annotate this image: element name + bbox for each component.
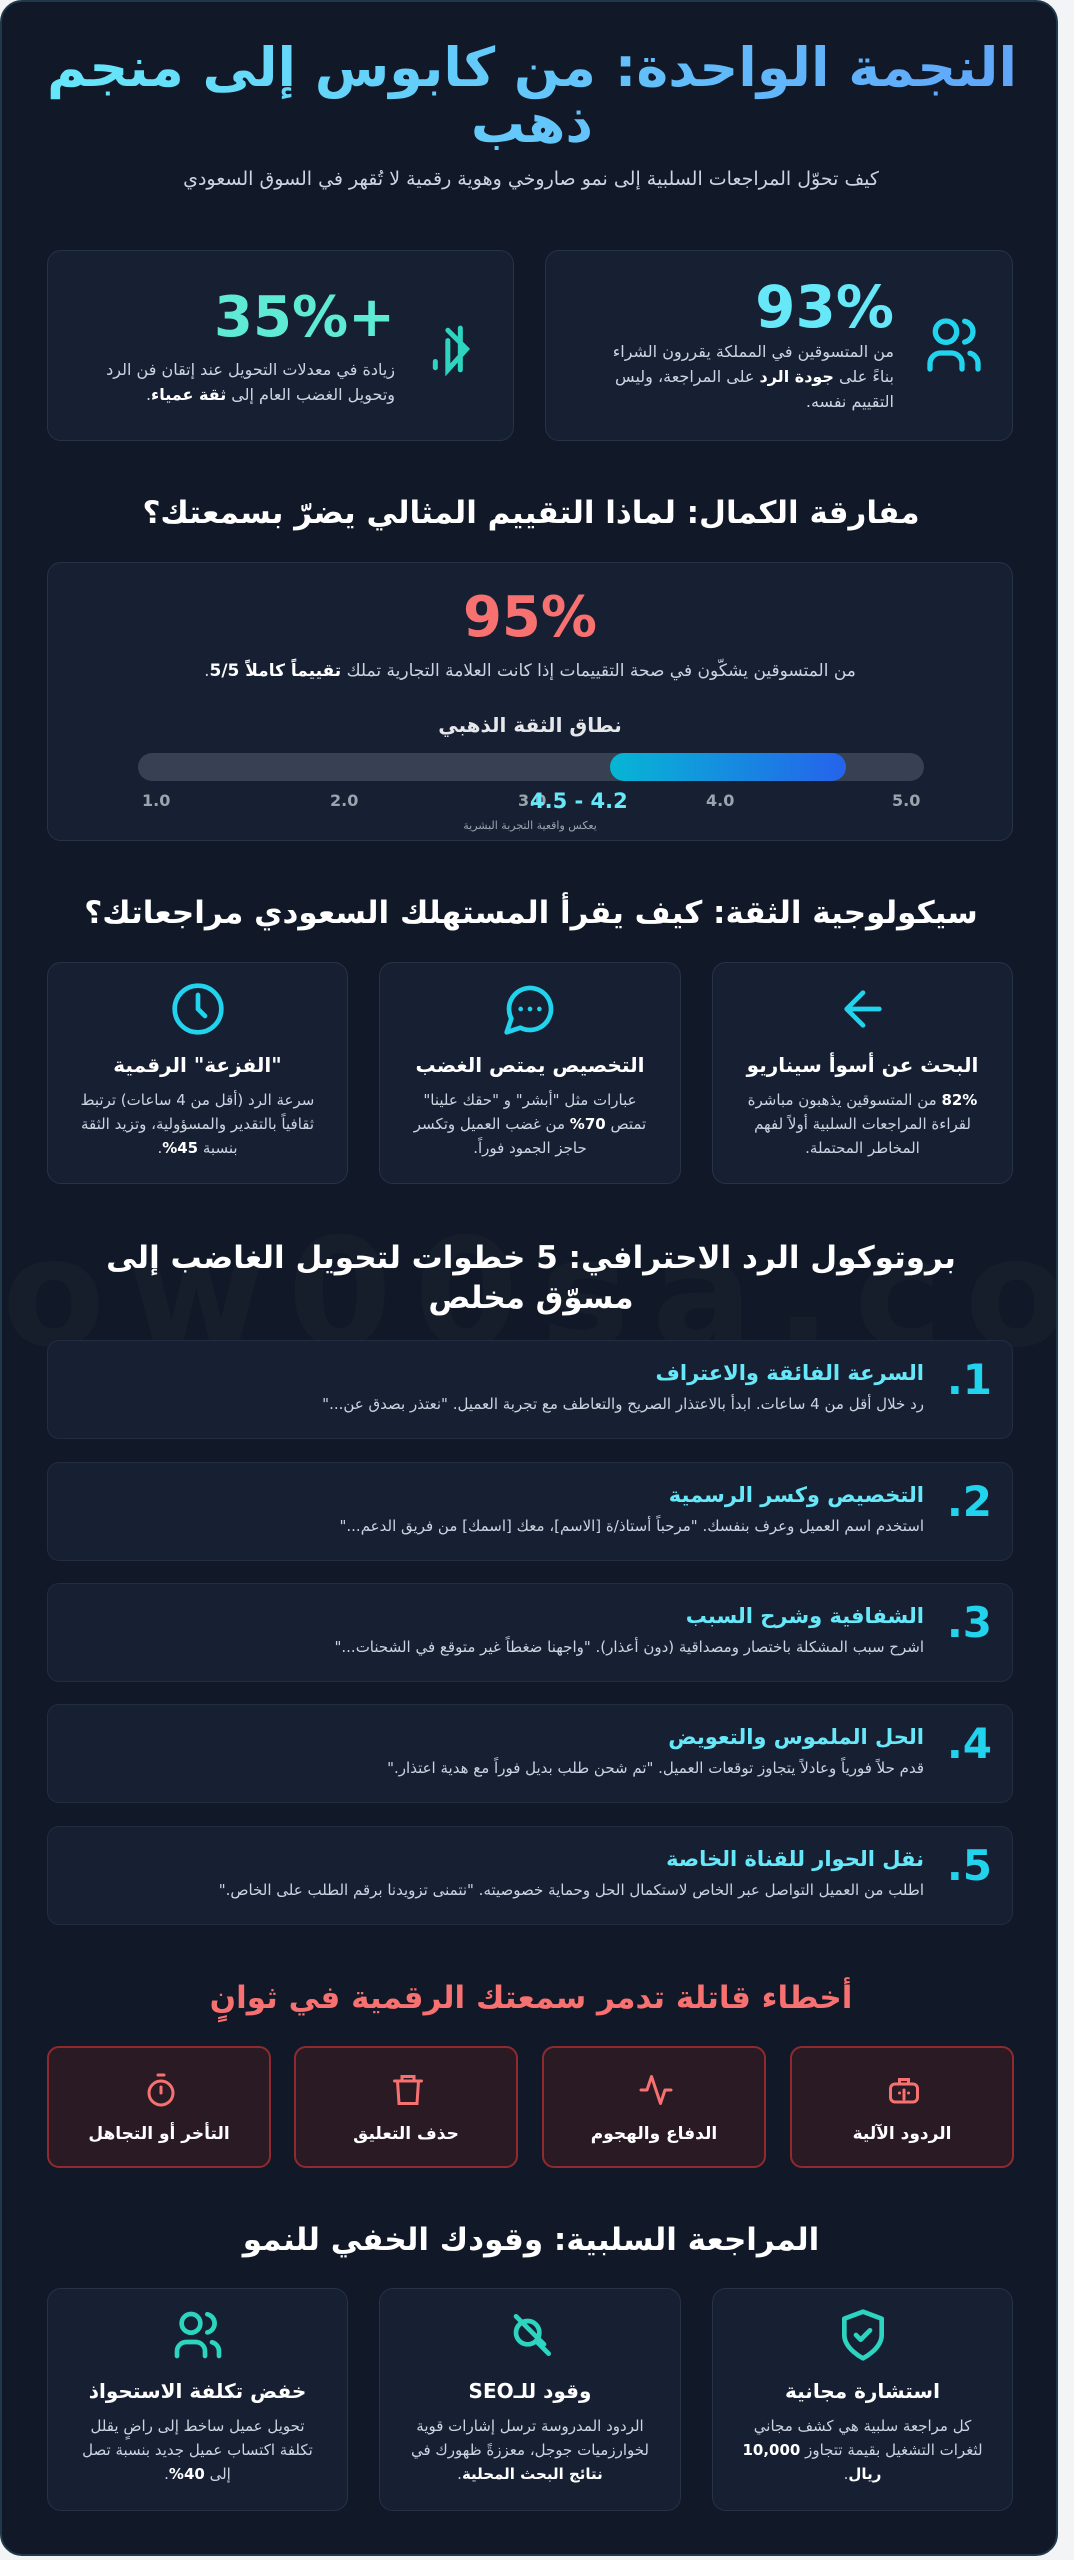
- mistake: delete: حذف التعليق: [353, 2124, 459, 2144]
- axis labels: 4.5 - 4.2: [530, 789, 628, 813]
- icon: trend: [432, 326, 470, 376]
- card: free consultation: كل مراجعة سلبية هي كشف مجاني لثغرات التشغيل بقيمة تتجاوز 10,000 ريال.: [742, 2417, 983, 2483]
- step 3: [47, 1583, 1013, 1682]
- icon: timer: [148, 2074, 174, 2106]
- text: من المتسوقين في المملكة يقررون الشراء بناءً على جودة الرد على المراجعة، وليس التقييم نفسه.: [613, 342, 894, 411]
- step 5: .5: [947, 1841, 992, 1890]
- icon: search: [514, 2314, 551, 2356]
- icon: pulse: [640, 2075, 672, 2105]
- step 3: اشرح سبب المشكلة باختصار ومصداقية (دون أعذار). "واجهنا ضغطاً غير متوقع في الشحنات...": [334, 1638, 924, 1656]
- subtitle: كيف تحوّل المراجعات السلبية إلى نمو صاروخي وهوية رقمية لا تُقهر في السوق السعودي: [183, 168, 879, 190]
- step 1: [47, 1340, 1013, 1439]
- card: digital faz'a: "الفزعة" الرقمية: [113, 1053, 282, 1077]
- mistake: defensive: [542, 2046, 766, 2168]
- title: النجمة الواحدة: من كابوس إلى منجم ذهب: [47, 36, 1017, 155]
- watermark: ow00sa.co: [2, 1207, 1058, 1381]
- icon: trash: [393, 2075, 423, 2105]
- number: 93%: [755, 273, 894, 341]
- axis labels: [142, 789, 920, 813]
- mistake: delete: [294, 2046, 518, 2168]
- step 5: [47, 1826, 1013, 1925]
- mistake: auto replies: الردود الآلية: [853, 2124, 951, 2144]
- big number: 95%: [463, 585, 597, 650]
- card: worst scenario: [712, 962, 1013, 1184]
- step 4: .4: [947, 1719, 992, 1768]
- step 4: قدم حلاً فورياً وعادلاً يتجاوز توقعات العميل. "تم شحن طلب بديل فوراً مع هدية اعتذار.": [387, 1759, 924, 1777]
- card: worst scenario: 82% من المتسوقين يذهبون مباشرة لقراءة المراجعات السلبية أولاً لفهم المخاطر المحتملة.: [748, 1091, 977, 1157]
- card: SEO fuel: الردود المدروسة ترسل إشارات قوية لخوارزميات جوجل، معززةً ظهورك في نتائج البحث المحلية.: [411, 2417, 649, 2483]
- step 4: الحل الملموس والتعويض: [668, 1725, 924, 1749]
- mistake: defensive: الدفاع والهجوم: [591, 2124, 717, 2144]
- heading: growth fuel: المراجعة السلبية: وقودك الخفي للنمو: [243, 2222, 819, 2258]
- card: acquisition cost: [47, 2288, 348, 2511]
- axis labels: 2.0: [330, 791, 358, 810]
- card: personalization: التخصيص يمتص الغضب: [416, 1053, 644, 1077]
- icon: users: [174, 2312, 222, 2358]
- step 1: .1: [947, 1355, 992, 1404]
- step 3: .3: [947, 1598, 992, 1647]
- step 4: [47, 1704, 1013, 1803]
- card: digital faz'a: [47, 962, 348, 1184]
- icon: arrow: [844, 990, 882, 1028]
- bar chart: trust range: [138, 753, 924, 781]
- icon: shield: [842, 2309, 884, 2361]
- mistake: auto replies: [790, 2046, 1014, 2168]
- card: acquisition cost: تحويل عميل ساخط إلى راضٍ يقلل تكلفة اكتساب عميل جديد بنسبة تصل إلى 40%.: [82, 2417, 313, 2483]
- card: SEO fuel: وقود للـSEO: [469, 2379, 591, 2403]
- card: acquisition cost: خفض تكلفة الاستحواذ: [89, 2379, 306, 2403]
- step 2: .2: [947, 1477, 992, 1526]
- number: 35%+: [214, 285, 395, 350]
- card: personalization: عبارات مثل "أبشر" و "حقك علينا" تمتص 70% من غضب العميل وتكسر حاجز الجمود فوراً.: [414, 1091, 646, 1157]
- card: free consultation: [712, 2288, 1013, 2511]
- step 1: رد خلال أقل من 4 ساعات. ابدأ بالاعتذار الصريح والتعاطف مع تجربة العميل. "نعتذر بصدق عن...": [322, 1395, 924, 1413]
- card: personalization: [379, 962, 681, 1184]
- panel: 95%: [47, 562, 1013, 841]
- axis labels: 5.0: [892, 791, 920, 810]
- heading: psychology: سيكولوجية الثقة: كيف يقرأ المستهلك السعودي مراجعاتك؟: [84, 895, 978, 931]
- step 2: [47, 1462, 1013, 1561]
- step 1: السرعة الفائقة والاعتراف: [656, 1361, 924, 1385]
- icon: users: [927, 318, 981, 372]
- card: digital faz'a: سرعة الرد (أقل من 4 ساعات) ترتبط ثقافياً بالتقدير والمسؤولية، وتزيد الثقة بنسبة 45%.: [81, 1091, 314, 1157]
- step 5: نقل الحوار للقناة الخاصة: [666, 1847, 924, 1871]
- heading: paradox: مفارقة الكمال: لماذا التقييم المثالي يضرّ بسمعتك؟: [142, 495, 920, 531]
- card: worst scenario: البحث عن أسوأ سيناريو: [747, 1053, 978, 1077]
- heading: fatal mistakes: أخطاء قاتلة تدمر سمعتك الرقمية في ثوانٍ: [210, 1980, 852, 2016]
- note: يعكس واقعية التجربة البشرية: [463, 819, 597, 832]
- card: free consultation: استشارة مجانية: [785, 2379, 940, 2403]
- step 2: التخصيص وكسر الرسمية: [669, 1483, 924, 1507]
- stat card: 35%+: [47, 250, 514, 441]
- icon: bot: [889, 2078, 919, 2104]
- mistake: delay: [47, 2046, 271, 2168]
- step 3: الشفافية وشرح السبب: [686, 1604, 924, 1628]
- icon: chat: [504, 986, 554, 1035]
- axis labels: 3.0: [518, 791, 546, 810]
- heading: protocol: بروتوكول الرد الاحترافي: 5 خطوات لتحويل الغاضب إلى مسوّق مخلص: [106, 1240, 956, 1316]
- step 5: اطلب من العميل التواصل عبر الخاص لاستكمال الحل وحماية خصوصيته. "نتمنى تزويدنا برقم الطلب على الخاص.": [219, 1881, 924, 1899]
- card: SEO fuel: [379, 2288, 681, 2511]
- description: من المتسوقين يشكّون في صحة التقييمات إذا كانت العلامة التجارية تملك تقييماً كاملاً 5/5.: [204, 661, 856, 681]
- axis labels: 4.0: [706, 791, 734, 810]
- icon: clock: [172, 983, 224, 1035]
- label: نطاق الثقة الذهبي: [438, 713, 622, 737]
- axis labels: 1.0: [142, 791, 170, 810]
- text: زيادة في معدلات التحويل عند إتقان فن الرد وتحويل الغضب العام إلى ثقة عمياء.: [106, 360, 395, 404]
- step 2: استخدم اسم العميل وعرف بنفسك. "مرحباً أستاذ/ة [الاسم]، معك [اسمك] من فريق الدعم...": [340, 1517, 924, 1535]
- mistake: delay: التأخر أو التجاهل: [88, 2124, 230, 2144]
- stat card: 93%: [545, 250, 1013, 441]
